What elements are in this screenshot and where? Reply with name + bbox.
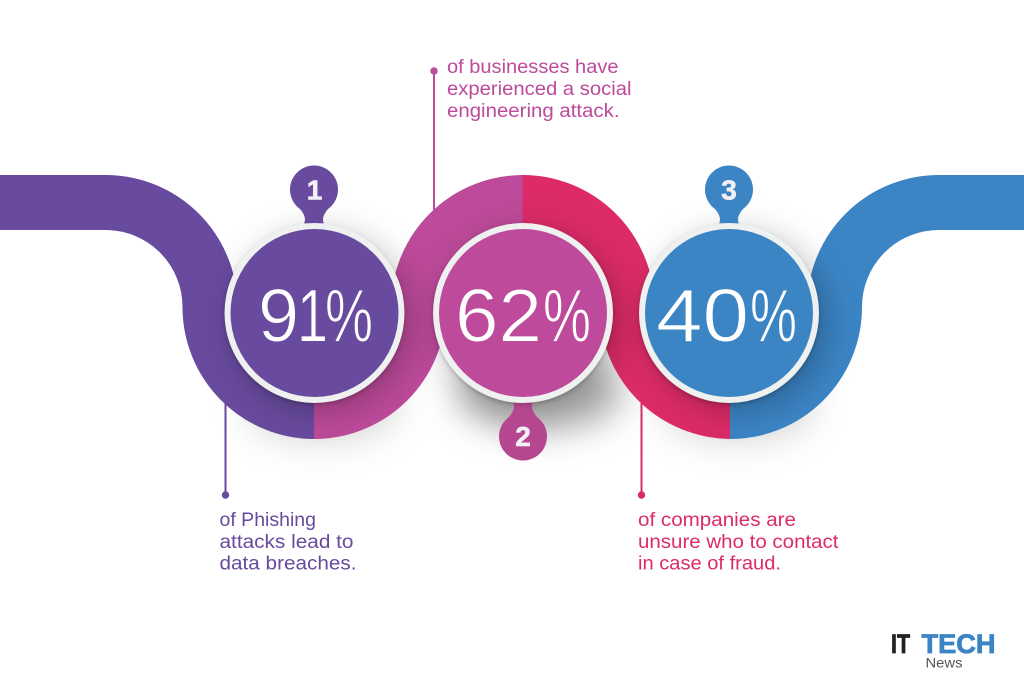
leader line: purple	[222, 400, 229, 499]
text block: red: of companies are	[638, 510, 796, 531]
stat circle 1: 9	[258, 274, 299, 358]
text block: purple: of Phishing	[220, 510, 316, 531]
ribbon shadows on background	[244, 352, 816, 444]
logo: News	[926, 654, 962, 670]
leader line: red	[638, 400, 645, 499]
ribbon segment: purple	[0, 202, 314, 412]
stat circle 3: %	[750, 274, 797, 358]
logo	[891, 629, 996, 670]
badge 2: 2	[515, 421, 531, 452]
stat circle 2	[433, 223, 613, 405]
stat circle 2: %	[543, 274, 591, 358]
ribbon segment: blue	[730, 202, 1024, 412]
text block: red: in case of fraud.	[638, 554, 781, 574]
logo: TECH	[922, 629, 996, 659]
badge 3: 3	[721, 174, 737, 206]
text block: purple	[220, 510, 356, 574]
badge 1: 1	[307, 174, 322, 206]
text block: magenta	[447, 57, 632, 122]
text block: red: unsure who to contact	[638, 532, 839, 553]
text block: red	[638, 510, 839, 574]
badge 3	[705, 166, 753, 224]
circle shadows cast on ribbon	[232, 232, 828, 412]
badge 2	[499, 402, 547, 460]
stat circle 1: 1	[297, 274, 328, 358]
stat circle 3	[639, 223, 819, 405]
leader line: magenta	[430, 67, 438, 215]
badge 1	[290, 166, 338, 224]
ribbon segment: magenta	[314, 202, 523, 412]
logo: IT	[891, 629, 910, 659]
ribbon segment: red	[522, 202, 731, 412]
text block: magenta: engineering attack.	[447, 101, 620, 122]
text block: purple: attacks lead to	[220, 532, 354, 553]
text block: magenta: experienced a social	[447, 79, 632, 100]
text block: magenta: of businesses have	[447, 57, 618, 78]
stat circle 2: 62	[455, 274, 542, 358]
stat circle 1	[224, 223, 404, 405]
ribbon	[0, 202, 1024, 412]
text block: purple: data breaches.	[220, 554, 356, 574]
stat circle 3: 40	[656, 274, 749, 358]
stat circle 1: %	[325, 274, 373, 358]
